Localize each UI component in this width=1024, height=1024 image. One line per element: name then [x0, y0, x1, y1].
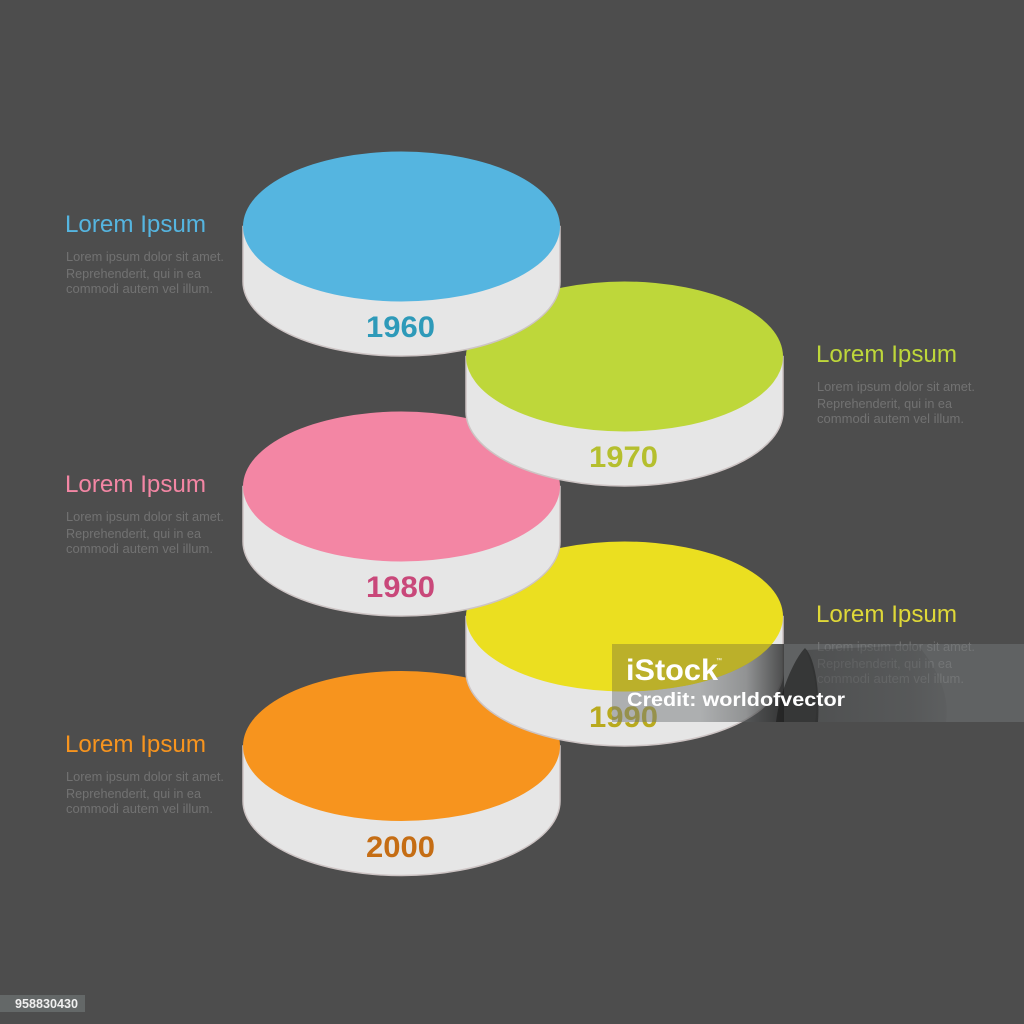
- disc: 1970 green: [466, 282, 783, 486]
- watermark: iStock credit: [612, 644, 1024, 722]
- body text: Lorem ipsum dolor sit amet.: [817, 640, 975, 654]
- heading: Lorem Ipsum: [65, 731, 206, 758]
- disc side: [243, 486, 560, 616]
- body text: commodi autem vel illum.: [817, 412, 964, 426]
- disc: 1980 pink: [243, 412, 560, 616]
- body text: Lorem ipsum dolor sit amet.: [817, 380, 975, 394]
- heading: Lorem Ipsum: [65, 471, 206, 498]
- disc side: [243, 746, 560, 876]
- disc: 1960 blue: [243, 152, 560, 356]
- body text: Lorem ipsum dolor sit amet.: [66, 250, 224, 264]
- text block: 1990: [816, 601, 975, 686]
- disc top: [243, 412, 560, 562]
- text block: 1960: [65, 211, 224, 296]
- body text: Reprehenderit, qui in ea: [66, 527, 201, 541]
- disc side: [243, 226, 560, 356]
- disc side: [466, 616, 783, 746]
- body text: Reprehenderit, qui in ea: [66, 267, 201, 281]
- watermark shadow gradient: [700, 644, 784, 722]
- body text: Reprehenderit, qui in ea: [817, 657, 952, 671]
- disc: 2000 orange: [243, 671, 560, 876]
- heading: Lorem Ipsum: [816, 601, 957, 628]
- text block: 1980: [65, 471, 224, 556]
- watermark tint over yellow disc: [612, 644, 772, 692]
- body text: Lorem ipsum dolor sit amet.: [66, 510, 224, 524]
- body text: commodi autem vel illum.: [66, 282, 213, 296]
- heading: Lorem Ipsum: [816, 341, 957, 368]
- year 1980: 1980: [366, 571, 435, 604]
- body text: Lorem ipsum dolor sit amet.: [66, 770, 224, 784]
- disc top: [243, 152, 560, 302]
- body text: Reprehenderit, qui in ea: [817, 397, 952, 411]
- watermark credit: Credit: worldofvector: [627, 690, 846, 711]
- body text: commodi autem vel illum.: [817, 672, 964, 686]
- id background: [0, 995, 85, 1012]
- image id tag: [0, 995, 85, 1012]
- text block: 1970: [816, 341, 975, 426]
- disc top: [466, 542, 783, 692]
- disc: 1990 yellow: [466, 542, 783, 746]
- watermark logo: iStock: [626, 654, 718, 687]
- year 1970: 1970: [589, 441, 658, 474]
- watermark trademark: ™: [716, 657, 722, 664]
- year 2000: 2000: [366, 831, 435, 864]
- watermark shape: dark leaf: [776, 648, 818, 722]
- text block: 2000: [65, 731, 224, 816]
- body text: Reprehenderit, qui in ea: [66, 787, 201, 801]
- disc side: [466, 356, 783, 486]
- disc top: [243, 671, 560, 821]
- heading: Lorem Ipsum: [65, 211, 206, 238]
- watermark shape: soft round: [806, 645, 947, 722]
- body text: commodi autem vel illum.: [66, 542, 213, 556]
- disc top: [466, 282, 783, 432]
- watermark band: [612, 644, 1024, 722]
- id number: 958830430: [15, 997, 78, 1011]
- year 1960: 1960: [366, 311, 435, 344]
- body text: commodi autem vel illum.: [66, 802, 213, 816]
- year 1990: 1990: [589, 701, 658, 734]
